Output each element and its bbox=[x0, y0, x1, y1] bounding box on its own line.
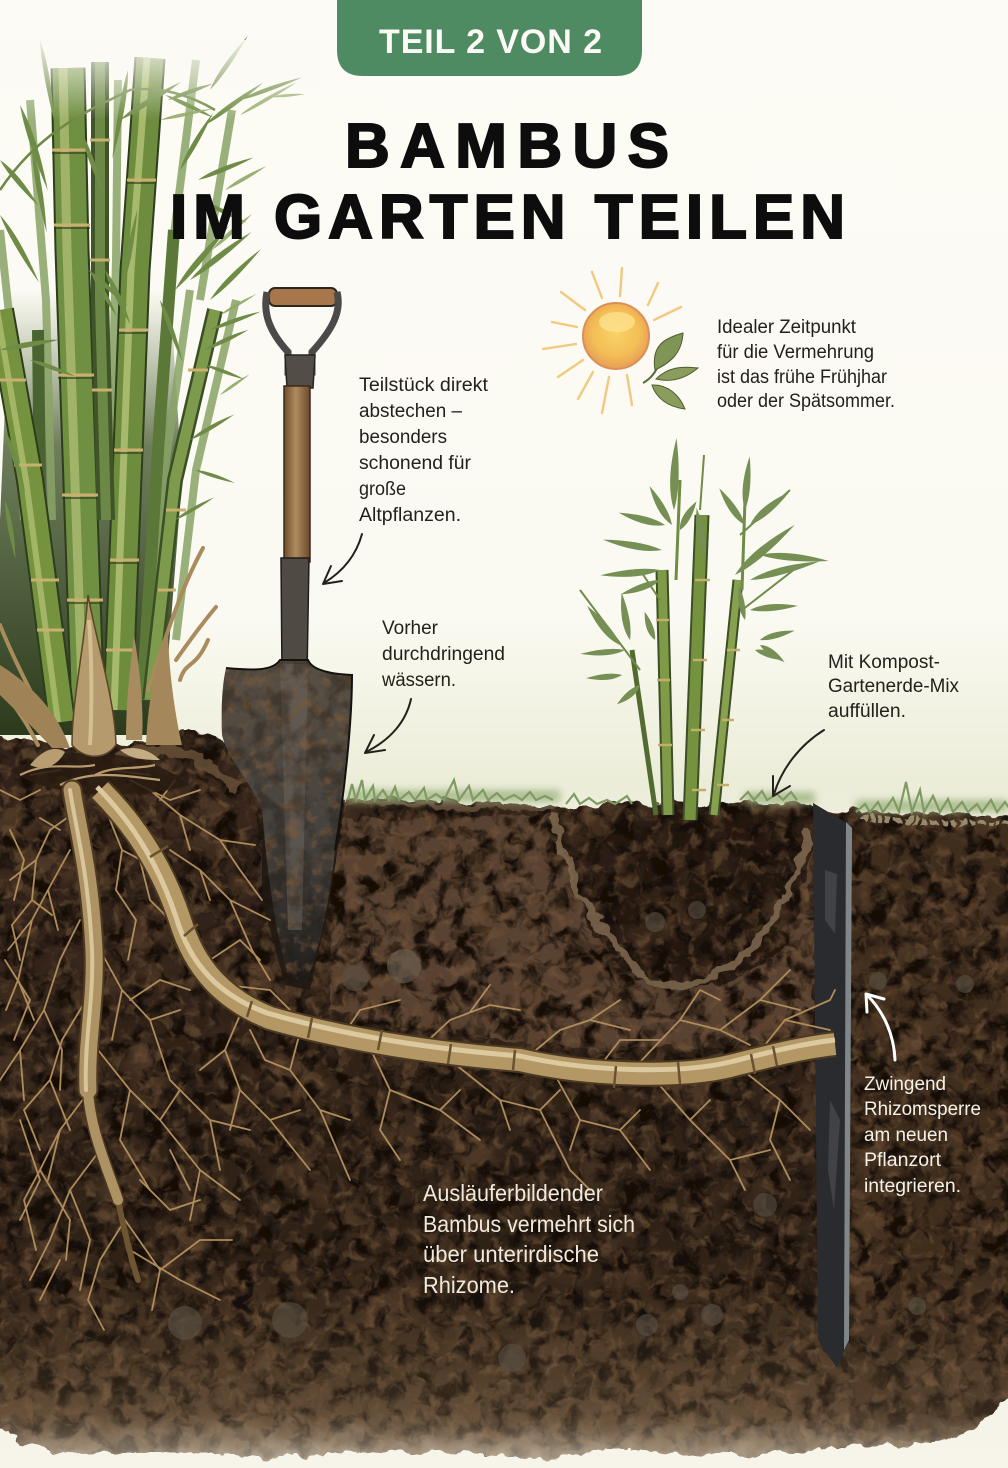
spade shaft bbox=[284, 386, 310, 562]
spade handle frame bbox=[266, 292, 338, 372]
arrow: to barrier bbox=[866, 994, 895, 1060]
spade collar bbox=[285, 355, 315, 388]
text: divide directly: abstechen – bbox=[359, 401, 462, 422]
text: barrier: Zwingend bbox=[864, 1074, 946, 1095]
spade blade bbox=[222, 661, 352, 984]
left clump block bbox=[0, 740, 285, 1040]
text: divide directly: große bbox=[359, 479, 406, 500]
text: compost: Gartenerde-Mix bbox=[828, 676, 959, 697]
excavated halo around new plant bbox=[330, 815, 815, 1050]
text: water bbox=[381, 618, 505, 691]
title: BAMBUS bbox=[345, 112, 669, 181]
text: divide directly: schonend für bbox=[359, 453, 472, 474]
text: divide directly bbox=[359, 375, 489, 526]
title: IM GARTEN TEILEN bbox=[170, 183, 845, 252]
text: rhizomes: Ausläuferbildender bbox=[423, 1180, 603, 1206]
sun icon bbox=[543, 268, 681, 413]
arrow: to blade bbox=[365, 699, 411, 753]
vertical rhizome bbox=[70, 790, 138, 1280]
spade blade outline bbox=[226, 660, 352, 850]
text: barrier: Pflanzort bbox=[864, 1150, 942, 1171]
main rhizome bbox=[97, 787, 835, 1088]
soil cross-section bbox=[0, 720, 1008, 1468]
text: timing bbox=[717, 317, 895, 412]
title bbox=[170, 112, 845, 252]
new plant in pit bbox=[580, 438, 829, 820]
text: rhizomes: über unterirdische bbox=[423, 1241, 599, 1267]
text: barrier: am neuen bbox=[864, 1125, 948, 1146]
text: barrier bbox=[864, 1074, 981, 1197]
text: timing: ist das frühe Frühjhar bbox=[717, 367, 888, 388]
text: barrier: integrieren. bbox=[864, 1176, 961, 1197]
left bamboo clump bbox=[0, 34, 320, 735]
planting pit bbox=[556, 812, 812, 989]
spade handle grip bbox=[269, 288, 337, 306]
text: water: Vorher bbox=[382, 618, 439, 639]
text: barrier: Rhizomsperre bbox=[864, 1099, 981, 1120]
text: water: durchdringend bbox=[382, 644, 505, 665]
text: timing: Idealer Zeitpunkt bbox=[717, 317, 857, 338]
arrow: to spade bbox=[323, 534, 362, 584]
text: divide directly: Altpflanzen. bbox=[359, 505, 461, 526]
header tab bbox=[337, 0, 642, 76]
text: compost bbox=[828, 652, 959, 722]
text: rhizomes: Rhizome. bbox=[423, 1272, 515, 1298]
header tab: TEIL 2 VON 2 bbox=[379, 23, 602, 61]
stones bbox=[168, 901, 974, 1372]
text: timing: oder der Spätsommer. bbox=[717, 391, 895, 412]
left clump shoots bbox=[0, 548, 216, 768]
spade bbox=[215, 288, 360, 990]
text: rhizomes bbox=[423, 1180, 635, 1298]
dark soil behind spade bbox=[262, 770, 345, 990]
text: compost: auffüllen. bbox=[828, 701, 906, 722]
spade socket bbox=[281, 558, 309, 676]
text: divide directly: besonders bbox=[359, 427, 447, 448]
text: water: wässern. bbox=[381, 670, 456, 691]
root crown bbox=[10, 753, 190, 795]
grass strips bbox=[348, 780, 1008, 812]
leaf sprig icon bbox=[643, 333, 698, 409]
text: compost: Mit Kompost- bbox=[828, 652, 940, 673]
text: timing: für die Vermehrung bbox=[717, 342, 874, 363]
text: rhizomes: Bambus vermehrt sich bbox=[423, 1211, 635, 1237]
text: divide directly: Teilstück direkt bbox=[359, 375, 489, 396]
soil right of barrier bbox=[850, 820, 1008, 1440]
arrow: to pit bbox=[773, 730, 824, 796]
rhizome barrier bbox=[813, 803, 852, 1368]
roots bbox=[0, 770, 835, 1330]
